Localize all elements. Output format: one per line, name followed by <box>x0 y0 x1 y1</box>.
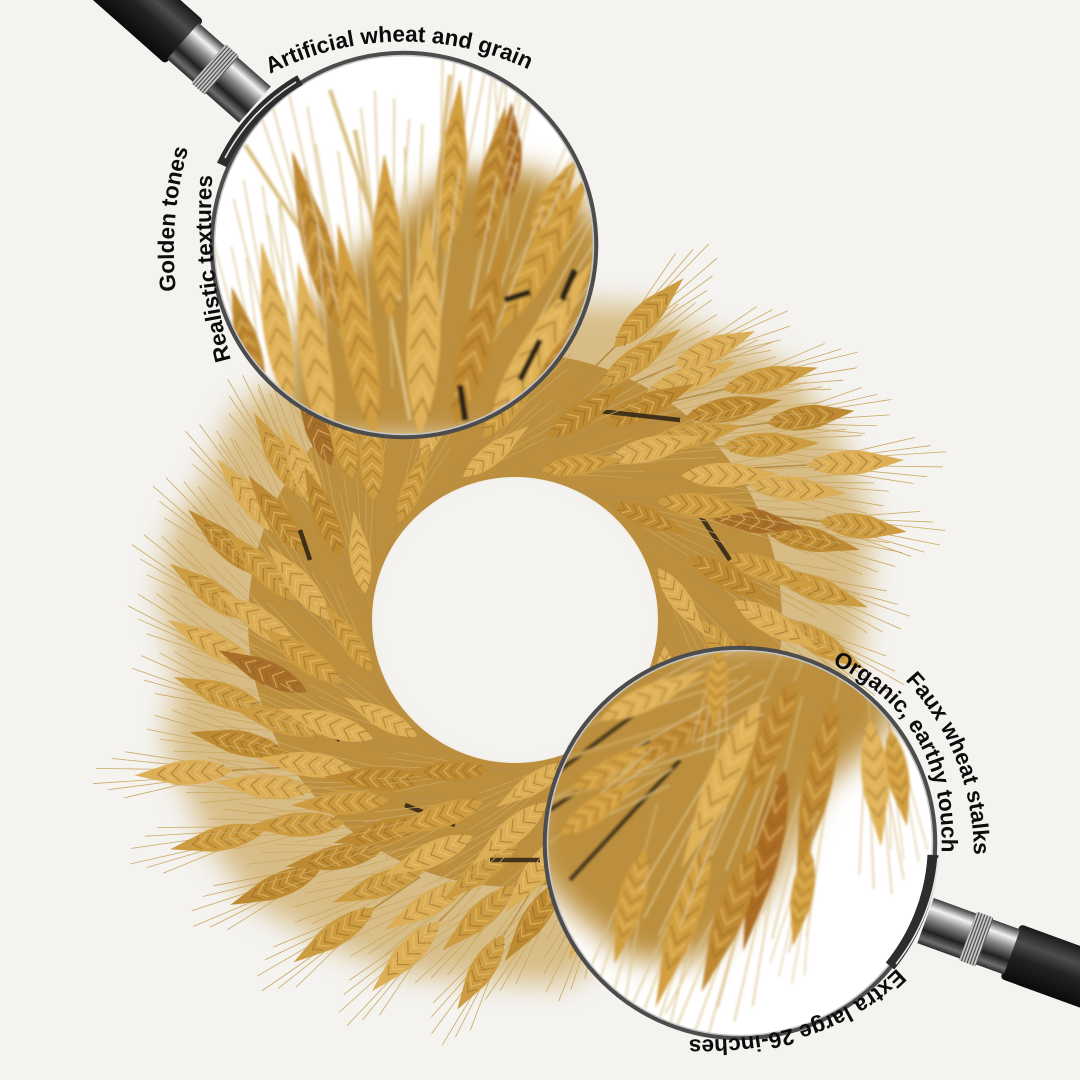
rim collar <box>890 855 933 966</box>
chrome collar <box>917 898 1020 975</box>
magnifier handle: top left <box>66 0 274 126</box>
knurled ring <box>959 911 994 967</box>
chrome collar <box>167 23 271 123</box>
magnifier lens: top left <box>210 50 598 440</box>
label: Artificial wheat and grain: Artificial wheat and grain <box>268 26 531 74</box>
rim collar <box>222 80 300 165</box>
rim <box>545 648 935 1038</box>
magnified wheat <box>215 60 593 434</box>
grip <box>66 0 204 64</box>
label: Faux wheat stalks: Faux wheat stalks <box>906 670 990 854</box>
magnified wheat <box>548 651 930 1032</box>
rim <box>212 53 596 437</box>
label: Realistic textures: Realistic textures <box>196 176 230 362</box>
wheat wreath <box>91 232 947 1053</box>
wreath silhouette underlay <box>160 300 872 985</box>
magnifier handle: bottom right <box>916 893 1080 1020</box>
magnifier lens: bottom right <box>542 646 938 1040</box>
label: Golden tones: Golden tones <box>158 147 188 291</box>
grip <box>1000 924 1080 1020</box>
label: Organic, earthy touch: Organic, earthy touch <box>836 653 958 851</box>
label: Extra large 26-inches: Extra large 26-inches <box>690 969 906 1056</box>
knurled ring <box>191 44 239 95</box>
